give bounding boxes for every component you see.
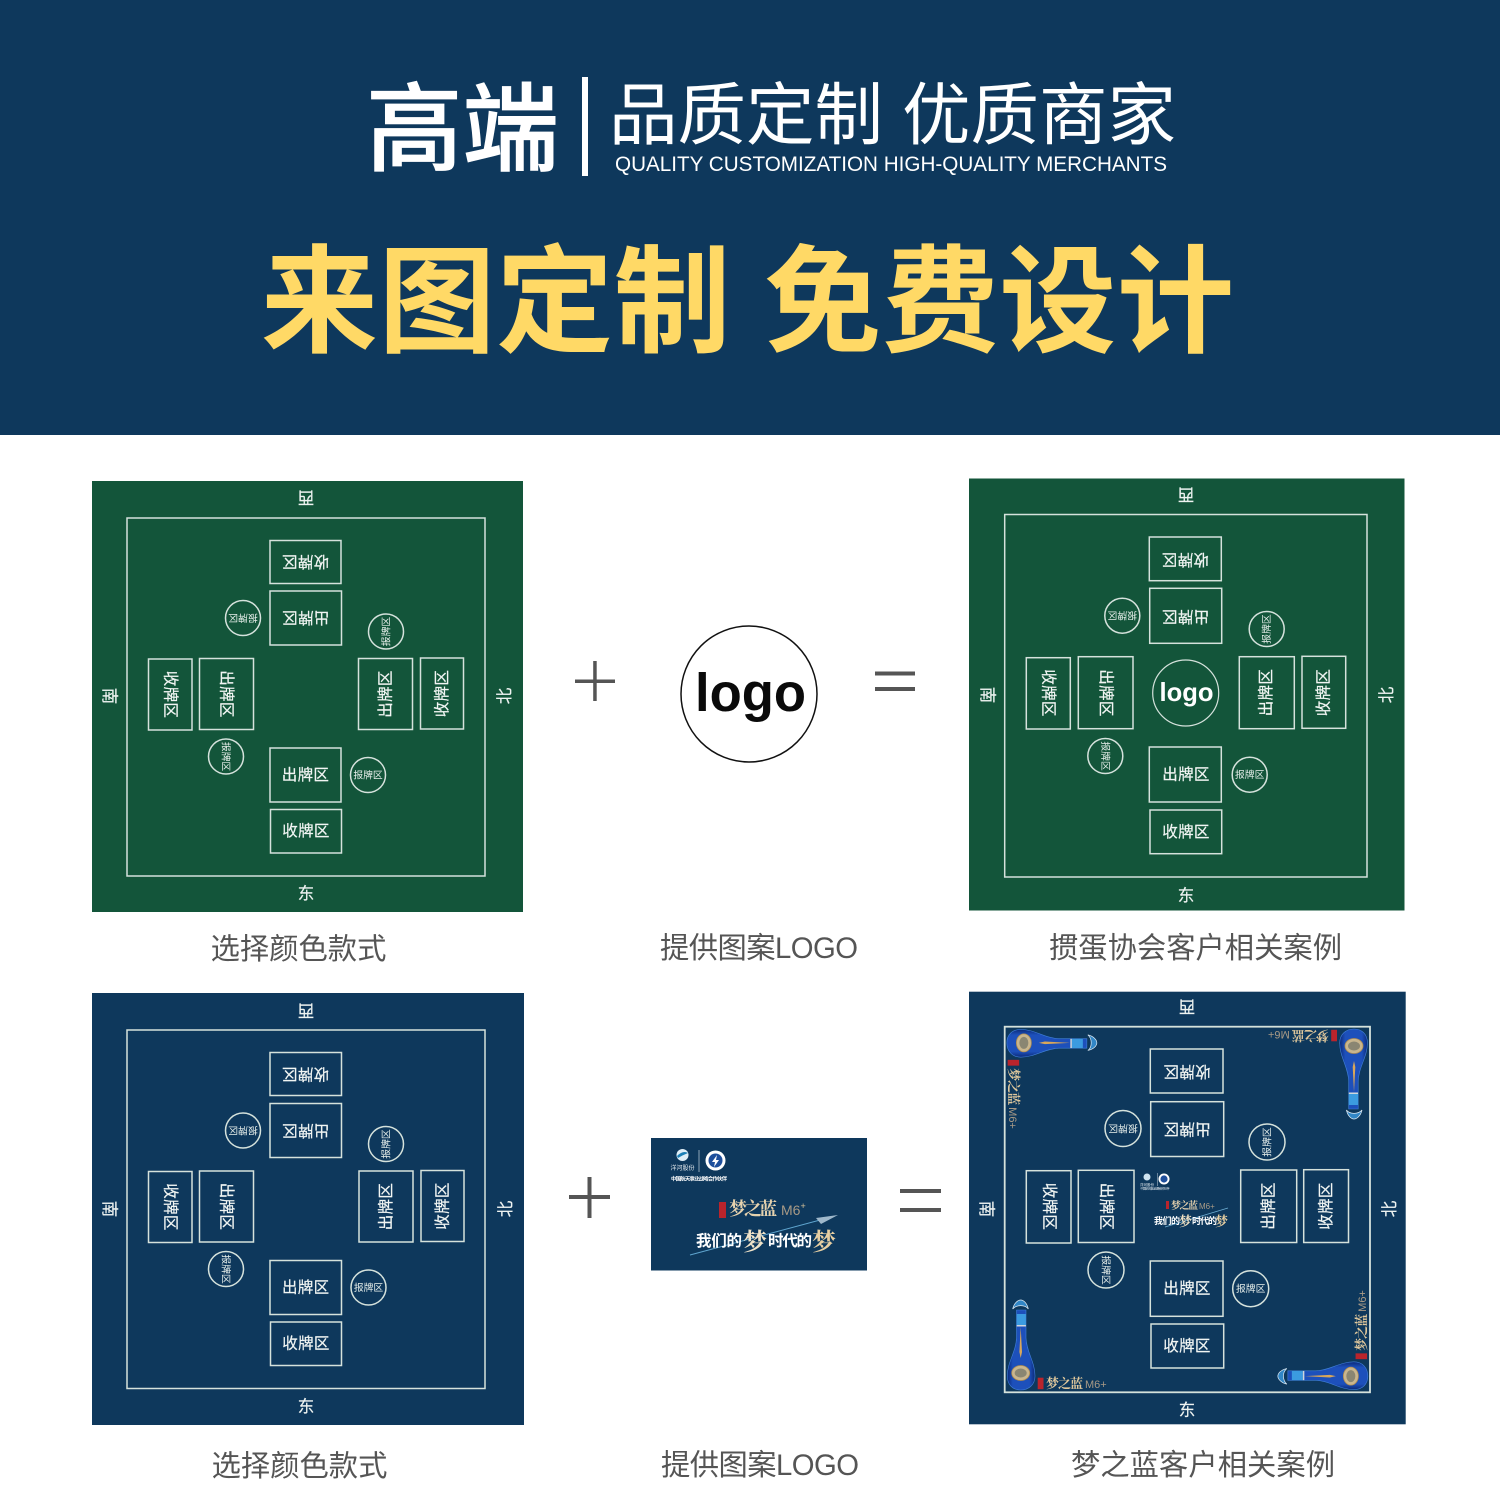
play zones: 收牌区 <box>1040 1183 1058 1230</box>
play zones: 收牌区 <box>1163 1062 1211 1080</box>
corner art: top right bottle: M6+ <box>1268 1028 1290 1040</box>
panel: navy mat Mengzhilan case <box>969 992 1406 1424</box>
call zones: 报牌区 <box>1235 768 1265 781</box>
direction labels: 南 <box>100 1201 119 1217</box>
corner art: bottom left bottle <box>1007 1300 1107 1391</box>
call zones: 报牌区 <box>1260 614 1273 644</box>
play zones: 出牌区 <box>1097 669 1115 717</box>
icon: logo circle: logo <box>695 663 806 723</box>
main title: 来图定制 免费设计 <box>261 237 1234 368</box>
play zones: 出牌区 <box>1257 669 1275 716</box>
center brand artwork: 洋河股份 <box>1140 1182 1154 1187</box>
call zones: 报牌区 <box>380 1129 393 1159</box>
play zones: 收牌区 <box>1162 550 1209 568</box>
corner art: bottom left bottle: 梦之蓝 <box>1046 1376 1083 1391</box>
direction labels: 南 <box>100 688 119 704</box>
play zones: 收牌区 <box>282 1065 329 1083</box>
icon: equals <box>875 672 915 691</box>
card: supplied brand artwork <box>651 1138 867 1270</box>
call zones <box>208 600 404 792</box>
caption: choose colour: 选择颜色款式 <box>211 933 386 966</box>
direction labels: 东 <box>298 1397 314 1416</box>
play zones: 收牌区 <box>282 1335 330 1353</box>
direction labels: 北 <box>1380 1200 1399 1217</box>
brand name: 梦之蓝 <box>729 1198 777 1219</box>
direction labels: 东 <box>1179 1400 1195 1419</box>
direction labels: 北 <box>496 1200 515 1217</box>
play zones: 收牌区 <box>434 1182 452 1230</box>
play zones: 出牌区 <box>282 1279 329 1297</box>
call zones: 报牌区 <box>219 742 232 771</box>
call zones: 报牌区 <box>1099 741 1112 771</box>
heading: quality customization: 品质定制 优质商家 <box>609 78 1176 154</box>
center brand artwork: 中国航天事业战略合作伙伴 <box>1140 1186 1170 1190</box>
play zones: 出牌区 <box>217 1183 235 1230</box>
play zones: 出牌区 <box>1163 1280 1211 1298</box>
play zones <box>148 1052 464 1366</box>
partner line: 中国航天事业战略合作伙伴 <box>671 1174 728 1182</box>
center brand artwork: 我们的 <box>1154 1215 1180 1226</box>
model name: + <box>800 1201 806 1211</box>
direction labels <box>100 488 514 903</box>
center brand artwork: 梦之蓝 <box>1171 1199 1198 1212</box>
icon: company swoosh <box>676 1149 688 1161</box>
call zones: 报牌区 <box>228 611 258 624</box>
corner art: top left bottle: 梦之蓝 <box>1006 1068 1021 1105</box>
call zones: 报牌区 <box>1108 1122 1138 1135</box>
call zones: 报牌区 <box>353 769 383 782</box>
play zones: 出牌区 <box>1163 1120 1211 1138</box>
play zones: 出牌区 <box>1162 766 1210 784</box>
caption: choose colour: 选择颜色款式 <box>212 1450 387 1483</box>
play zones: 出牌区 <box>282 1121 329 1139</box>
direction labels <box>978 485 1396 905</box>
slogan: 梦 <box>812 1229 836 1256</box>
caption: Mengzhilan case: 梦之蓝客户相关案例 <box>1071 1449 1335 1482</box>
slogan: 我们的 <box>696 1231 742 1250</box>
play zones: 收牌区 <box>161 1183 179 1231</box>
caption: provide logo: 提供图案LOGO <box>661 1449 859 1482</box>
play zones: 出牌区 <box>1260 1182 1278 1230</box>
play zones: 收牌区 <box>1163 1337 1211 1355</box>
icon: equals <box>900 1189 941 1212</box>
play zones: 出牌区 <box>377 670 395 718</box>
play zones: 收牌区 <box>282 822 330 840</box>
direction labels: 南 <box>978 687 997 703</box>
direction labels <box>100 1001 515 1416</box>
arrow <box>690 1216 835 1255</box>
corner art: bottom left bottle: M6+ <box>1085 1379 1107 1391</box>
play zones: 出牌区 <box>1097 1183 1115 1230</box>
company name: 洋河股份 <box>670 1164 695 1172</box>
direction labels: 北 <box>495 687 514 704</box>
panel: green mat template <box>92 481 523 912</box>
play zones: 出牌区 <box>377 1183 395 1230</box>
panel: navy mat template <box>92 993 524 1425</box>
slogan: 时代的 <box>768 1232 812 1250</box>
direction labels: 西 <box>1178 485 1194 503</box>
play zones: 收牌区 <box>1039 669 1057 717</box>
icon: space emblem <box>706 1150 726 1170</box>
model name: M6 <box>781 1202 800 1218</box>
center brand artwork: 梦 <box>1215 1214 1228 1229</box>
play zones: 出牌区 <box>1162 607 1209 625</box>
panel: header banner <box>0 0 1500 435</box>
slogan <box>696 1229 836 1256</box>
call zones: 报牌区 <box>1099 1255 1112 1285</box>
center brand artwork: 时代的 <box>1192 1215 1217 1226</box>
center brand artwork: M6+ <box>1199 1202 1215 1211</box>
icon: logo circle <box>681 626 817 762</box>
play zones: 出牌区 <box>282 608 329 626</box>
call zones: 报牌区 <box>1107 609 1137 622</box>
play zones: 收牌区 <box>1317 1182 1335 1230</box>
play zones: 收牌区 <box>1162 823 1210 841</box>
direction labels <box>977 997 1399 1419</box>
center brand artwork: 梦 <box>1179 1214 1192 1229</box>
panel: green mat with logo <box>969 478 1404 910</box>
divider bar <box>582 77 588 176</box>
call zones <box>1088 1110 1285 1307</box>
call zones: 报牌区 <box>228 1124 258 1137</box>
corner art: bottom right bottle: 梦之蓝 <box>1354 1314 1369 1351</box>
call zones: 报牌区 <box>1261 1127 1274 1157</box>
play zones: 收牌区 <box>282 552 329 570</box>
center logo <box>1153 660 1219 726</box>
call zones: 报牌区 <box>354 1281 383 1294</box>
center brand artwork <box>1140 1173 1228 1229</box>
subheading: English: QUALITY CUSTOMIZATION HIGH-QUALITY MERCHANTS <box>615 153 1167 176</box>
play zones <box>1026 537 1346 854</box>
corner art: top right bottle: 梦之蓝 <box>1292 1028 1329 1043</box>
call zones <box>1088 598 1284 792</box>
direction labels: 西 <box>298 1001 314 1019</box>
play zones: 出牌区 <box>282 766 329 784</box>
call zones: 报牌区 <box>380 617 393 646</box>
direction labels: 东 <box>298 884 314 903</box>
direction labels: 西 <box>1179 997 1195 1015</box>
corner art: top left bottle <box>1006 1029 1097 1129</box>
slogan: 梦 <box>743 1229 767 1256</box>
corner art: bottom right bottle <box>1278 1290 1369 1390</box>
play zones: 收牌区 <box>161 671 179 718</box>
direction labels: 东 <box>1178 886 1194 905</box>
call zones: 报牌区 <box>1236 1282 1266 1295</box>
direction labels: 南 <box>977 1201 996 1217</box>
center logo: logo <box>1160 677 1214 707</box>
direction labels: 西 <box>298 488 314 506</box>
corner art: top left bottle: M6+ <box>1006 1107 1018 1129</box>
call zones <box>208 1113 404 1305</box>
red stamp <box>719 1202 726 1218</box>
play zones: 收牌区 <box>433 670 451 717</box>
corner art: top right bottle <box>1268 1028 1367 1119</box>
play zones <box>1026 1049 1348 1368</box>
play zones: 出牌区 <box>217 670 235 718</box>
direction labels: 北 <box>1377 686 1396 703</box>
play zones: 收牌区 <box>1315 669 1333 716</box>
caption: provide logo: 提供图案LOGO <box>660 932 858 965</box>
icon: plus <box>575 661 615 701</box>
icon: plus <box>569 1177 610 1218</box>
play zones <box>148 540 464 853</box>
call zones: 报牌区 <box>219 1254 232 1284</box>
heading: 高端: 高端 <box>366 77 559 184</box>
corner art: bottom right bottle: M6+ <box>1357 1290 1369 1312</box>
caption: guandan case: 掼蛋协会客户相关案例 <box>1049 932 1342 965</box>
